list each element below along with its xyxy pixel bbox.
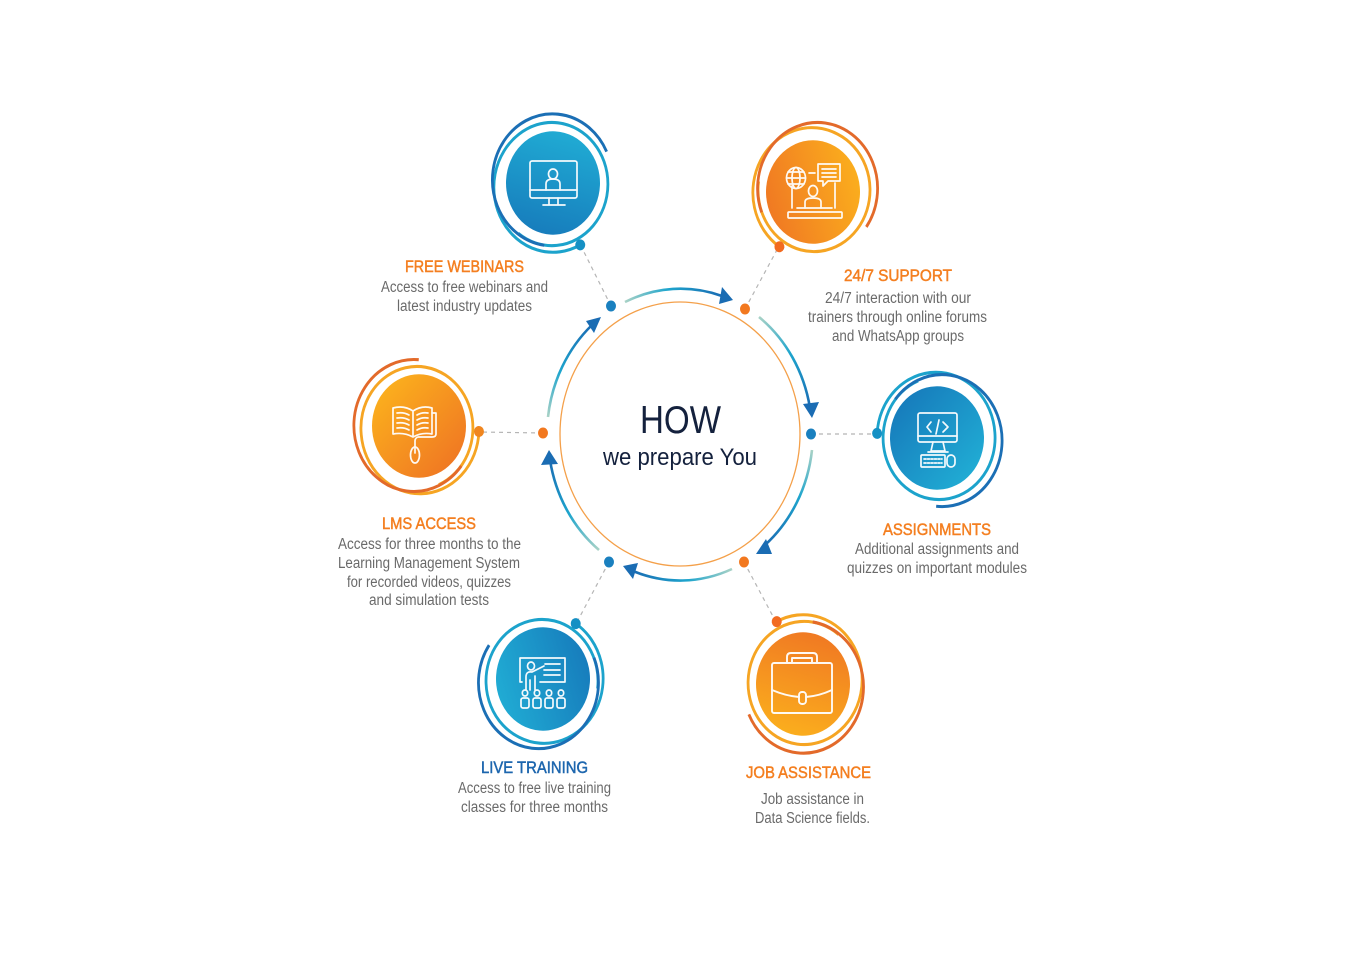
description: 24/7 support: 24/7 interaction with our: [825, 290, 971, 307]
title: assignments: ASSIGNMENTS: [883, 520, 991, 539]
description: LMS access: Learning Management System: [338, 555, 520, 572]
icon: book and mouse: [393, 407, 436, 463]
title: live training: LIVE TRAINING: [481, 758, 588, 777]
description: 24/7 support: and WhatsApp groups: [832, 328, 964, 345]
description: LMS access: for recorded videos, quizzes: [347, 574, 511, 591]
arrow: job assistance to live training: [623, 563, 732, 581]
icon: monitor with person: [530, 161, 577, 205]
badge: orange: [351, 356, 487, 497]
description: assignments: [847, 541, 1027, 577]
description: assignments: Additional assignments and: [855, 541, 1019, 558]
arrow: LMS to webinars: [548, 317, 601, 417]
description: 24/7 support: [808, 290, 987, 345]
description: free webinars: latest industry updates: [397, 298, 532, 315]
icon: online support: [786, 164, 842, 218]
badge: orange: [716, 586, 888, 778]
description: free webinars: Access to free webinars and: [381, 279, 548, 296]
panel: 24/7 support: [730, 98, 987, 345]
title: free webinars: FREE WEBINARS: [405, 257, 524, 276]
cycle arrows: [541, 287, 819, 581]
cycle node dots: [538, 300, 816, 568]
subheading: we prepare You: we prepare You: [602, 444, 757, 471]
description: LMS access: Access for three months to the: [338, 536, 521, 553]
badge: blue: [467, 89, 641, 282]
panel: free webinars: [381, 89, 641, 315]
description: LMS access: and simulation tests: [369, 592, 489, 609]
panel: job assistance: [716, 586, 888, 827]
description: live training: [458, 780, 611, 816]
badge: blue: [458, 584, 626, 773]
arrow: support to assignments: [759, 317, 819, 418]
heading: HOW: HOW: [640, 399, 721, 442]
title: LMS access: LMS ACCESS: [382, 514, 476, 533]
arrow: webinars to support: [625, 287, 733, 304]
description: assignments: quizzes on important modules: [847, 560, 1027, 577]
icon: computer with code: [918, 413, 957, 467]
description: live training: Access to free live training: [458, 780, 611, 797]
description: free webinars: [381, 279, 548, 315]
panel: live training: [458, 584, 626, 816]
badge: blue: [870, 370, 1004, 509]
description: live training: classes for three months: [461, 799, 608, 816]
icon: trainer and audience: [520, 658, 565, 708]
icon: briefcase: [772, 653, 832, 713]
badge: orange: [730, 98, 899, 287]
title: job assistance: JOB ASSISTANCE: [746, 763, 871, 782]
panel: assignments: [847, 370, 1027, 577]
arrow: live training to LMS: [541, 450, 599, 550]
description: job assistance: Job assistance in: [761, 791, 864, 808]
description: job assistance: [755, 791, 870, 827]
description: LMS access: [338, 536, 521, 609]
central circle with title: [560, 302, 800, 566]
arrow: assignments to job assistance: [756, 450, 812, 554]
title: 24/7 support: 24/7 SUPPORT: [844, 266, 952, 285]
description: job assistance: Data Science fields.: [755, 810, 870, 827]
dashed connectors: [479, 244, 875, 622]
description: 24/7 support: trainers through online forums: [808, 309, 987, 326]
panel: LMS access: [338, 356, 521, 609]
